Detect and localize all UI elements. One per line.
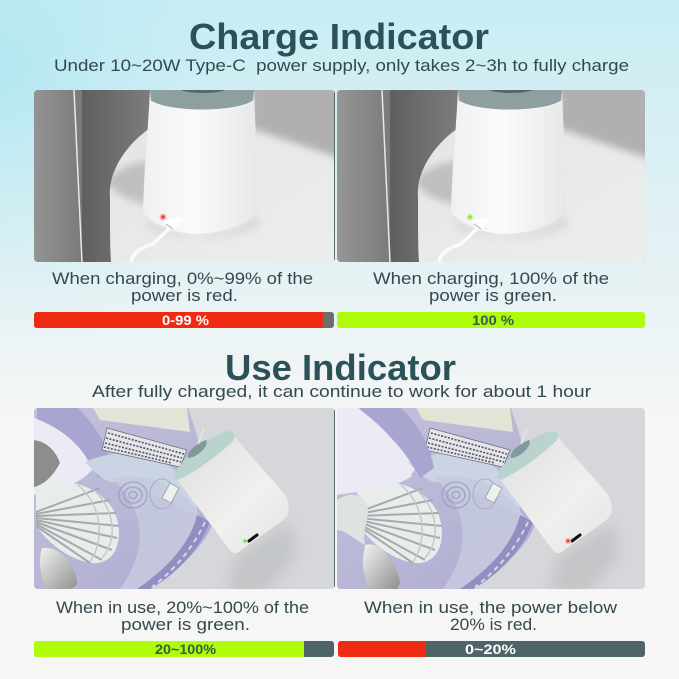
caption: in use green bbox=[56, 598, 309, 634]
caption: charging red: power is red. bbox=[131, 286, 238, 305]
icon: red use LED bbox=[565, 538, 571, 544]
caption: in use red: 20% is red. bbox=[450, 615, 537, 634]
icon: green use LED bbox=[242, 538, 248, 544]
icon: red charging LED bbox=[160, 214, 166, 220]
panel: charging red bbox=[34, 90, 335, 262]
panel: in use red bbox=[337, 408, 645, 589]
bar: 20 to 100 percent: 20~100% bbox=[155, 642, 216, 657]
caption: charged green bbox=[373, 269, 609, 305]
caption: charged green: When charging, 100% of the bbox=[373, 269, 609, 288]
title: Charge Indicator: Charge Indicator bbox=[189, 16, 489, 57]
caption: charging red bbox=[52, 269, 313, 305]
bar: 100 percent: 100 % bbox=[472, 313, 514, 328]
subtitle: charging time: Under 10~20W Type-C power supply, only takes 2~3h to fully charge bbox=[54, 56, 629, 75]
subtitle: working time: After fully charged, it can continue to work for about 1 hour bbox=[92, 382, 591, 401]
icon: green charged LED bbox=[467, 214, 473, 220]
caption: in use green: power is green. bbox=[121, 615, 250, 634]
bar: 0-99 percent: 0-99 % bbox=[162, 313, 209, 328]
bar: 20 to 100 percent bbox=[34, 641, 334, 657]
caption: in use green: When in use, 20%~100% of the bbox=[56, 598, 309, 617]
caption: charged green: power is green. bbox=[429, 286, 557, 305]
bar: 0-99 percent bbox=[34, 312, 334, 328]
caption: in use red bbox=[364, 598, 618, 634]
panel: charged green bbox=[337, 90, 645, 262]
title: Use Indicator: Use Indicator bbox=[225, 347, 456, 388]
panel: in use green bbox=[34, 408, 335, 589]
bar: 100 percent bbox=[337, 312, 645, 328]
caption: charging red: When charging, 0%~99% of the bbox=[52, 269, 313, 288]
bar: 0 to 20 percent: 0~20% bbox=[465, 642, 516, 657]
bar: 0 to 20 percent bbox=[338, 641, 645, 657]
caption: in use red: When in use, the power below bbox=[364, 598, 618, 617]
